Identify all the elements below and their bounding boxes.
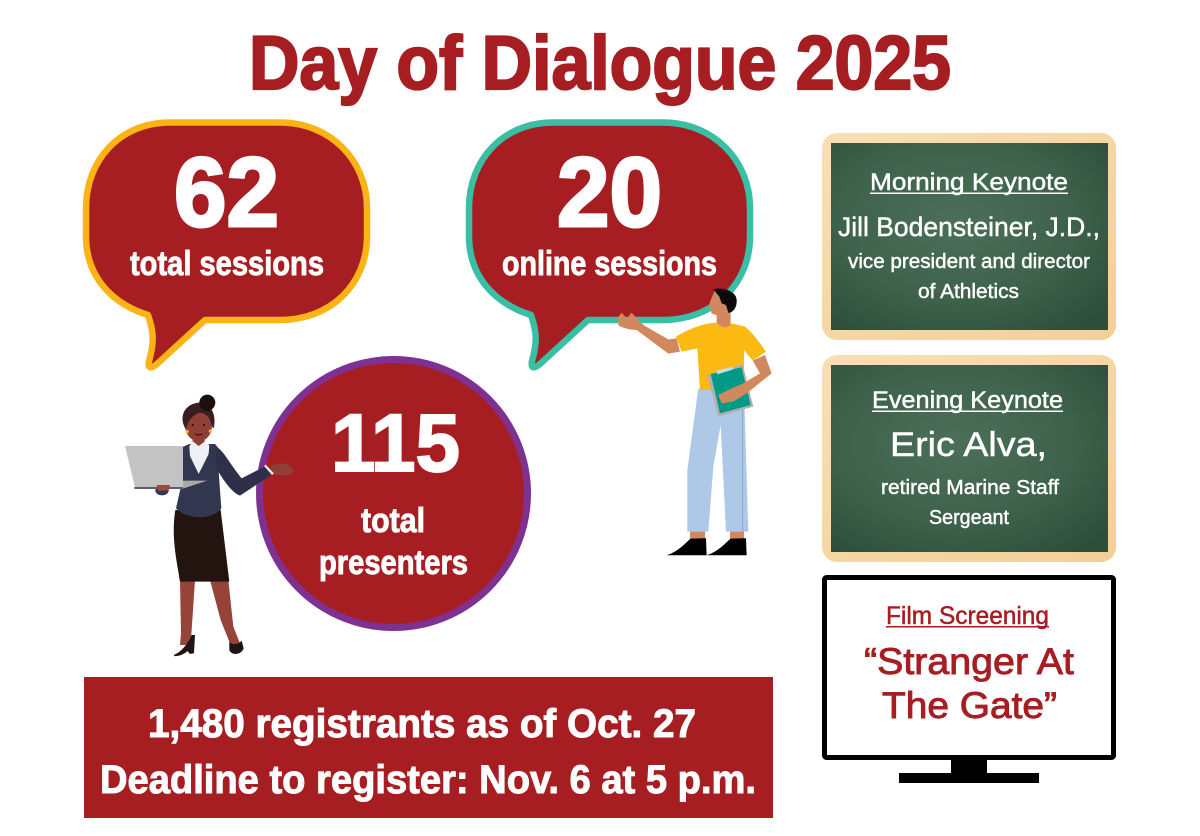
illustration: woman with laptop: [125, 395, 294, 656]
role line 2: Sergeant: [929, 507, 1009, 529]
chalkboard: evening keynote: [822, 355, 1116, 562]
banner: registration: [84, 677, 773, 818]
speech bubble: total sessions: [86, 122, 367, 367]
heading: morning keynote: Morning Keynote: [870, 169, 1068, 196]
heading: film screening: Film Screening: [886, 602, 1049, 630]
stat: 20: 20: [557, 137, 662, 247]
tv: film screening: [824, 578, 1114, 783]
label: total: total: [361, 502, 425, 540]
film title line 2: The Gate”: [882, 685, 1057, 726]
name: Jill Bodensteiner: Jill Bodensteiner, J.D.,: [838, 212, 1100, 242]
text: deadline: Deadline to register: Nov. 6 at 5 p.m.: [100, 758, 756, 802]
role line 1: vice president and director: [848, 251, 1090, 273]
label: online sessions: online sessions: [502, 245, 717, 283]
label: total sessions: total sessions: [130, 245, 324, 283]
text: registrants: 1,480 registrants as of Oct. 27: [148, 702, 696, 746]
title: Day of Dialogue 2025: [249, 21, 951, 106]
name: Eric Alva: Eric Alva,: [890, 426, 1047, 464]
heading: evening keynote: Evening Keynote: [872, 387, 1063, 414]
illustration: man with clipboard: [617, 289, 772, 555]
label: presenters: presenters: [319, 544, 468, 582]
film title line 1: “Stranger At: [864, 641, 1075, 682]
role line 1: retired Marine Staff: [881, 477, 1059, 499]
stat: 62: 62: [174, 137, 279, 247]
circle: total presenters: [260, 360, 528, 628]
chalkboard: morning keynote: [822, 133, 1116, 340]
speech bubble: online sessions: [469, 122, 750, 367]
role line 2: of Athletics: [918, 281, 1019, 303]
stat: 115: 115: [331, 398, 460, 489]
